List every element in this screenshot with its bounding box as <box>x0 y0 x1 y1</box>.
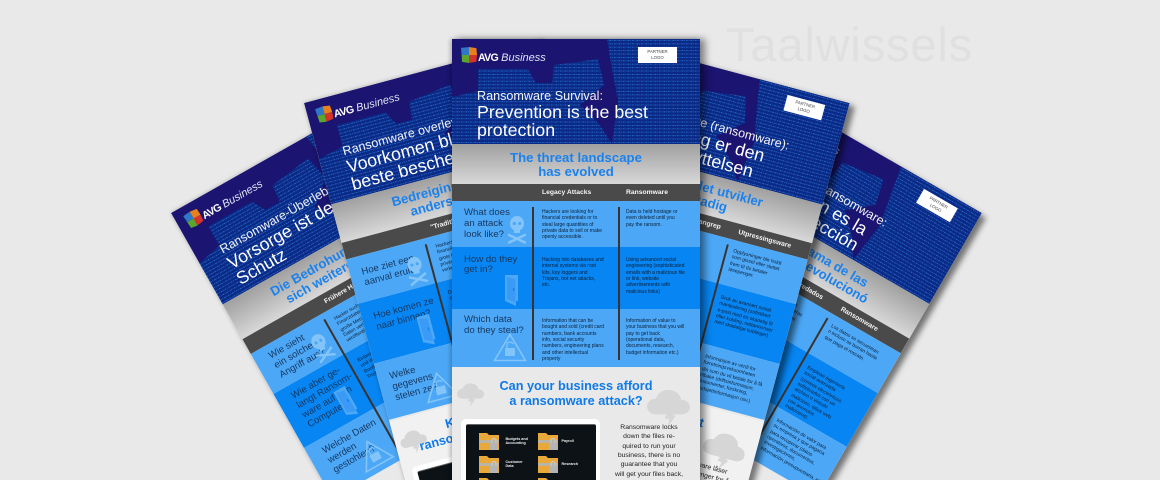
row: which data do they steal: (operational data, <box>626 337 665 343</box>
heading: threat landscape: has evolved <box>538 164 614 179</box>
row: data stolen: su empresa y que pagaría <box>772 423 825 457</box>
row: data stolen: cuentas bancarias, <box>693 392 732 418</box>
row: how in: troyanos, botnets, etc. <box>723 339 769 369</box>
row: data stolen <box>374 299 628 420</box>
video panel: locked folders: Data <box>506 464 514 468</box>
header: Dutch: LOGO <box>501 63 514 71</box>
text: ransomware locks: guarantee that you <box>621 461 677 468</box>
row: attack look: økonomisk informasjon <box>649 232 700 252</box>
row: how in <box>540 240 795 364</box>
heading: German threat landscape: sich weiterentwickelt <box>283 228 405 306</box>
row: how do they get in: malicious links) <box>626 289 660 295</box>
row: how do they get in: emails with a malicious file <box>626 270 685 276</box>
row: attack look <box>663 229 901 393</box>
row: how do they get in: Trojans, bot net attacks, <box>542 276 595 282</box>
header: German: Schutz <box>233 244 290 288</box>
row: how in: Computer? <box>306 397 352 430</box>
header: Dutch: Ransomware overleven: <box>341 109 476 158</box>
text: ransomware locks: Ransomware locks <box>620 424 678 431</box>
header: Spanish: mejor protección <box>738 172 862 255</box>
table header: Norwegian: Utpressingsware <box>737 229 791 250</box>
row: data stolen: stelen ze? <box>394 381 439 403</box>
row: attack look: credenciales financieras <box>754 287 803 319</box>
row: attack look: Hvordan ser <box>575 204 628 228</box>
header: Spanish: LOGO <box>929 202 942 213</box>
heading: Norwegian threat landscape: Trusselbildet utvikler <box>633 161 764 210</box>
row: which data do they steal: Information that can be <box>542 318 593 324</box>
title: Prevention is the best <box>477 102 648 122</box>
divider bars <box>424 244 466 392</box>
row: how do they get in: Using advanced social <box>626 257 676 263</box>
heading: Norwegian threat landscape <box>572 140 822 243</box>
row: data stolen: para recuperar (datos <box>769 429 813 458</box>
heading: threat landscape <box>452 144 700 184</box>
row: how in: naar binnen? <box>375 307 432 332</box>
row: attack look: große Mengen privater <box>339 302 386 333</box>
row: data stolen: ¿Qué datos <box>634 333 683 368</box>
heading: German threat landscape: Die Bedrohungslage hat <box>268 211 407 299</box>
row: how in: (correos electrónicos <box>799 376 843 404</box>
row: attack look: verkopen of te delen. <box>442 256 488 274</box>
header: Dutch <box>304 57 516 204</box>
row: what does an attack look like: private data to sell or make <box>542 228 602 234</box>
row: how in: y sistemas internos con <box>730 328 778 360</box>
row: data stolen: is voor uw bedrijf. <box>546 323 585 339</box>
row: attack look: Los hackers buscan <box>757 281 798 309</box>
row: data stolen: werden <box>326 440 359 465</box>
row: attack look: ¿Qué aspecto <box>688 240 746 280</box>
row: attack look: tiene un <box>682 250 718 277</box>
row: attack look: Hackere ser etter <box>651 226 689 242</box>
text: ransomware locks: business, there is no <box>618 452 680 459</box>
row: how in: databases en interne <box>449 284 496 302</box>
divider bar <box>532 207 534 360</box>
heading: can your business afford <box>500 379 652 408</box>
header: Norwegian: beste beskyttelsen <box>608 124 755 181</box>
row: which data do they steal: your business that you will <box>626 324 684 330</box>
title <box>477 102 648 140</box>
row: how in: e-mails en links. <box>532 271 568 286</box>
row: how in: Einbruch in Datenbanken <box>357 330 409 363</box>
header: German: Vorsorge ist der beste <box>224 170 384 273</box>
header: Norwegian: AVG Business <box>628 58 697 87</box>
row: which data do they steal: pay to get back <box>626 331 660 337</box>
video panel: locked folders: Customer <box>506 460 523 464</box>
row: how in: langt Ransom- <box>295 370 355 411</box>
video panel: locked folders: Payroll <box>562 439 574 443</box>
row: how in <box>273 272 520 448</box>
header: German: PARTNER <box>346 115 366 130</box>
row: data stolen: (tarjetas de crédito, <box>696 387 736 413</box>
row: attack look: som gissel eller slettet <box>730 254 779 273</box>
row: which data do they steal: and other intellectual <box>542 350 588 356</box>
row: which data do they steal: budget information etc.) <box>626 350 679 356</box>
subtitle: Ransomware Survival: <box>477 89 603 103</box>
video panel: locked folders <box>461 419 600 480</box>
row: what does an attack look like: an attack <box>464 218 503 229</box>
brand name: AVG Business <box>478 52 546 64</box>
row: data stolen: stjeler de? <box>544 318 590 340</box>
row: how in: Hacking inn i databaser <box>638 273 690 292</box>
divider bar <box>618 207 620 360</box>
row: attack look: Finanzdaten oder wollen <box>336 295 387 327</box>
row: attack look: Hoe ziet een <box>360 253 415 277</box>
lower section: Dutch: Ransomware vergrendelt <box>557 414 632 440</box>
heading: German threat landscape <box>223 182 458 339</box>
row: how in: Social Engineering mit <box>430 292 476 322</box>
row: data stolen: Daten, die für Ihr <box>460 351 495 375</box>
row: attack look: Daten verkaufen oder <box>342 309 387 338</box>
row: attack look: Opplysninger blir holdt <box>732 248 782 267</box>
row: attack look: o robar datos privados <box>751 292 797 322</box>
table header: Spanish <box>686 215 909 353</box>
text: ransomware locks: quired to run your <box>622 443 676 450</box>
row: data stolen <box>525 300 779 420</box>
row: which data do they steal: Which data <box>464 314 512 325</box>
panel: Norwegian infographic <box>465 39 849 480</box>
row: attack look: para venderlos. <box>747 298 780 320</box>
row: attack look: veröffentlichen. <box>346 322 378 344</box>
row: attack look <box>556 195 807 304</box>
header: German: AVG Business <box>200 178 265 222</box>
header: Norwegian: Forebygging er den <box>612 106 766 165</box>
row: attack look: Angriff aus? <box>278 345 327 380</box>
icon: left cloud <box>457 384 484 406</box>
heading: Dutch threat landscape: anders dan ooit <box>409 179 508 219</box>
row: how do they get in: engineering (sophisticated <box>626 263 684 269</box>
heading: Spanish threat landscape: El panorama de las <box>759 217 871 290</box>
header: Spanish: PARTNER <box>929 195 949 210</box>
lower section: Norwegian: Ransomware låser <box>671 454 728 476</box>
video panel: locked folders: Research <box>562 462 578 466</box>
row: which data do they steal: bought and sold (credit card <box>542 324 604 330</box>
row: how do they get in: advertisements with <box>626 282 670 288</box>
lower section: Dutch: nodig hebt. <box>583 437 617 453</box>
header: Dutch: Voorkomen blijft de <box>344 118 496 176</box>
divider bars <box>603 222 645 370</box>
row: how in: Acceso a bases de datos <box>733 323 784 356</box>
row: attack look: o incluso se borran hasta <box>827 329 878 362</box>
row: how in: keyloggers, Trojans. <box>452 297 497 314</box>
row: what does an attack look like <box>452 201 700 247</box>
row: how in: Emplean ingeniería <box>806 365 846 392</box>
row: data stolen: Informasjon av verdi for <box>704 353 756 373</box>
header: Dutch: AVG Business <box>332 91 401 120</box>
row: how in <box>632 269 878 447</box>
row: which data do they steal: info, social security <box>542 337 584 343</box>
table header: Ransomware <box>626 189 668 196</box>
row: attack look <box>251 232 489 394</box>
row: data stolen: Welche Daten <box>320 417 378 456</box>
header: German: Ransomware-Überleben: <box>217 175 346 256</box>
partner logo box: PARTNER <box>647 49 668 54</box>
row: attack look: ataque? <box>677 259 713 286</box>
video panel: locked folders: Budgets and <box>506 437 528 441</box>
row: which data do they steal: documents, research, <box>626 343 674 349</box>
row: data stolen: Daten, die sich kaufen <box>387 387 433 416</box>
row: data stolen: investigaciones, <box>763 440 796 463</box>
heading: Dutch threat landscape: Bedreigingen zijn nu <box>390 161 519 209</box>
row: data stolen <box>304 326 548 480</box>
heading: can your business afford: a ransomware attack? <box>509 394 643 408</box>
row: how in: systemen met rootkits, <box>451 289 501 308</box>
header: German <box>171 115 384 304</box>
row: how in: med skadelige koblinger) <box>713 319 768 339</box>
row: how in: Rootkits, Keylogger und <box>363 343 412 374</box>
row: data stolen: roban? <box>629 343 660 367</box>
row: how in: archivo o vínculo <box>793 387 829 411</box>
row: attack look: Gegevens worden <box>516 211 557 228</box>
text: ransomware locks <box>615 424 683 478</box>
row: how in: Geavanceerde social <box>528 256 575 274</box>
divider bars <box>675 274 754 408</box>
text: ransomware locks: down the files re- <box>623 433 675 440</box>
table header: Spanish: Ransomware <box>839 306 879 333</box>
row: what does an attack look like: openly accessible. <box>542 234 583 240</box>
row: attack look: que paga el rescate. <box>823 334 866 362</box>
heading: Spanish threat landscape <box>694 180 929 339</box>
row: data stolen: Informatie die waardevol <box>544 313 598 333</box>
panel: Dutch infographic <box>304 39 688 480</box>
table header: Norwegian <box>568 179 812 259</box>
row: data stolen: seguridad social). <box>690 398 727 422</box>
lower section: Dutch <box>389 357 688 480</box>
header: Spanish <box>738 113 982 304</box>
row: what does an attack look like: Hackers are looking for <box>542 209 593 215</box>
row: which data do they steal: property <box>542 356 560 362</box>
lower section: Norwegian <box>465 358 764 480</box>
table header: German <box>242 217 467 354</box>
row: data stolen: Unternehmen wertvoll sind. <box>463 346 519 381</box>
row: data stolen: kjøpes og selges. <box>621 338 660 354</box>
row: which data do they steal: Information of value to <box>626 318 675 324</box>
row: attack look: gegijzeld of gewist. <box>518 217 560 234</box>
row: attack look: frem til du betaler <box>729 260 768 276</box>
row: what does an attack look like: What does <box>464 207 510 218</box>
heading: Norwegian threat landscape: seg stadig <box>661 184 728 215</box>
row: how do they get in: etc. <box>542 282 550 288</box>
row: attack look: Daten werden gesperrt <box>406 250 453 280</box>
row: what does an attack look like: Data is held hostage or <box>626 209 677 215</box>
table header: Norwegian: Tradisjonelle angrep <box>656 207 721 231</box>
row: data stolen: Informasjon som kan <box>623 332 669 349</box>
icon: AVG logo <box>461 47 477 63</box>
row: which data do they steal: numbers, bank accounts <box>542 331 596 337</box>
row: how in: Door in te breken in <box>447 279 491 296</box>
row: how do they get in: get in? <box>464 264 493 275</box>
panel: English infographic <box>452 39 700 480</box>
row: attack look: Hackers zoeken <box>435 234 471 249</box>
row: attack look: oder gelöscht, bis Sie <box>409 257 454 286</box>
row: data stolen: Información que puede <box>702 376 750 406</box>
row: what does an attack look like: look like? <box>464 229 504 240</box>
row: data stolen: tilbake (driftsinformasjon, <box>699 372 754 392</box>
row: attack look: løsepenger. <box>727 266 754 279</box>
row: how in: und interne Systeme. <box>360 340 404 369</box>
row: how in: con anuncios <box>787 398 815 418</box>
row: data stolen: dokumenter, forskning, <box>697 378 748 397</box>
row: attack look: grote hoeveelheden <box>438 244 482 262</box>
row: how in: manipulering (sofistikert <box>718 301 771 320</box>
header: Norwegian: Utpressingsvare (ransomware): <box>617 94 790 153</box>
row: how in: ¿Cómo <box>663 283 696 308</box>
table header: Dutch: "Traditionele" aanvallen <box>430 204 506 231</box>
partner logo box <box>638 47 677 63</box>
row: attack look: aanval eruit? <box>363 263 419 288</box>
row: attack look: eller private data. <box>648 239 686 254</box>
partner logo box: LOGO <box>651 55 664 60</box>
row: how in: kommer de <box>559 262 608 285</box>
row: data stolen: Welke <box>388 364 417 382</box>
row: data stolen: Informatie die gekocht <box>463 336 512 355</box>
icon: right cloud <box>647 390 690 426</box>
row: what does an attack look like: financial credentials or to <box>542 215 597 221</box>
lower section: Norwegian: Har bedriften råd til et <box>574 382 705 430</box>
row: data stolen: gestohlen? <box>331 442 377 475</box>
row: how in: maliciosos). <box>783 403 809 422</box>
heading: threat landscape: The threat landscape <box>510 150 642 165</box>
table header: German: Frühere Hackerangriffe <box>323 262 391 305</box>
row: data stolen: din som du vil betale for å få <box>701 366 762 388</box>
row: how do they get in: or link, website <box>626 276 659 282</box>
row: which data do they steal: numbers, engineering plans <box>542 343 604 349</box>
row: how do they get in: Hacking into databases and <box>542 257 604 263</box>
watermark title: Taalwissels: Taalwissels <box>726 18 973 71</box>
row: how in: entran? <box>658 292 692 318</box>
row: data stolen: en verkocht kan worden. <box>465 341 519 361</box>
video panel: locked folders: Accounting <box>506 441 526 445</box>
heading: Spanish threat landscape: amenazas evolucionó <box>745 226 871 307</box>
table header: German: Ransomware <box>396 237 436 264</box>
header: Dutch: PARTNER <box>495 57 516 67</box>
row: attack look: ein solcher <box>272 338 318 371</box>
row: data stolen: und verkaufen lassen. <box>390 393 435 422</box>
row: attack look: das Lösegeld zahlen. <box>412 263 456 291</box>
row: data stolen: budsjettinformasjon osv.) <box>696 384 750 404</box>
header: Spanish: Sobrevivir al ransomware: <box>757 145 890 230</box>
row: how do they get in: internal systems via root <box>542 263 596 269</box>
row: attack look <box>346 195 597 304</box>
row: how in: E-Mails, bösartigen <box>433 301 473 327</box>
table header: Spanish: Ataques heredados <box>766 264 824 301</box>
row: how in: Dateien oder Links. <box>436 307 476 333</box>
row: how in <box>358 239 613 363</box>
text: ransomware locks: will get your files back, <box>615 471 683 478</box>
row: what does an attack look like: steal large quantities of <box>542 222 593 228</box>
row: attack look: et angrep ut? <box>572 215 629 240</box>
row: attack look: Wie sieht <box>267 332 307 361</box>
row: how in: engineering met <box>530 265 566 280</box>
row: what does an attack look like: pay the ransom. <box>626 222 662 228</box>
header: Norwegian: PARTNER <box>794 99 815 109</box>
row: data stolen: forretningsvirksomheten <box>702 359 755 379</box>
lower section: Dutch: Kan uw bedrijf zich een <box>444 381 583 431</box>
header: Norwegian: LOGO <box>797 106 810 114</box>
row: attack look: financiële gegevens of <box>437 237 486 256</box>
heading: Dutch threat landscape <box>331 140 581 243</box>
row: attack look: privégegevens om te <box>440 250 486 268</box>
row: data stolen <box>603 323 847 480</box>
header: Norwegian <box>608 58 850 204</box>
row: how in: seg inn? <box>556 273 594 293</box>
row: how in: rootkits, keyloggers y <box>727 334 770 362</box>
header: Spanish: Prevención es la <box>747 156 871 239</box>
lower section: afford <box>452 369 700 480</box>
row: how in: eller kobling, nettannonser <box>715 313 773 334</box>
table header: Legacy Attacks <box>542 189 591 196</box>
row: how in: e-post med en skadelig fil <box>716 307 773 327</box>
row: how in: Bruk av avansert sosial <box>720 294 771 314</box>
row: how do they get in <box>452 247 700 309</box>
row: what does an attack look like: even deleted until you <box>626 215 675 221</box>
header: German: LOGO <box>352 122 366 133</box>
panel: Spanish infographic <box>487 89 982 480</box>
panel: German infographic <box>171 91 663 480</box>
header: English <box>452 39 700 144</box>
row: data stolen: comprarse y venderse <box>699 381 745 411</box>
row: how do they get in: kits, key loggers and <box>542 270 588 276</box>
lower section: Norwegian: ransomware-angrep? <box>571 397 700 444</box>
row: data stolen: Información de valor para <box>775 418 827 451</box>
table header: Dutch: Ransomware <box>511 192 553 209</box>
row: which data do they steal <box>452 309 700 367</box>
table header: Dutch <box>342 179 585 259</box>
row: which data do they steal: do they steal? <box>464 325 524 336</box>
lower section: Dutch: de bestanden die u <box>568 425 626 447</box>
row: how in: Wie aber ge- <box>289 365 343 401</box>
title: protection <box>477 120 555 140</box>
row: data stolen: gegevens <box>391 371 434 392</box>
row: how in: Hoe komen ze <box>372 295 435 322</box>
header: Dutch: beste bescherming <box>349 136 499 194</box>
row: how in: og interne systemer. <box>637 279 682 296</box>
row: how do they get in: How do they <box>464 254 517 264</box>
row: how in: Hvordan <box>562 252 600 272</box>
row: how in: ware auf den <box>300 383 354 420</box>
lower section: Dutch: ransomware-aanval veroorloven? <box>418 388 617 454</box>
row: data stolen: operativos, documentos, <box>766 434 816 467</box>
row: attack look: Hacker suchen nach <box>333 294 376 322</box>
divider bars <box>323 319 400 453</box>
row: how in: Trojaner, Botnets usw. <box>366 350 412 380</box>
table header <box>452 184 700 201</box>
row: data stolen: Hvilke data <box>547 308 596 330</box>
header: Spanish: AVG Business <box>777 113 842 158</box>
row: how in: social avanzada <box>803 370 837 393</box>
row: attack look: Los datos se secuestran <box>830 323 880 356</box>
row: how in: sofisticados con un <box>796 381 836 408</box>
row: how in: malicioso, sitios web <box>790 392 832 420</box>
heading: can your business afford: Can your business afford <box>500 379 652 393</box>
